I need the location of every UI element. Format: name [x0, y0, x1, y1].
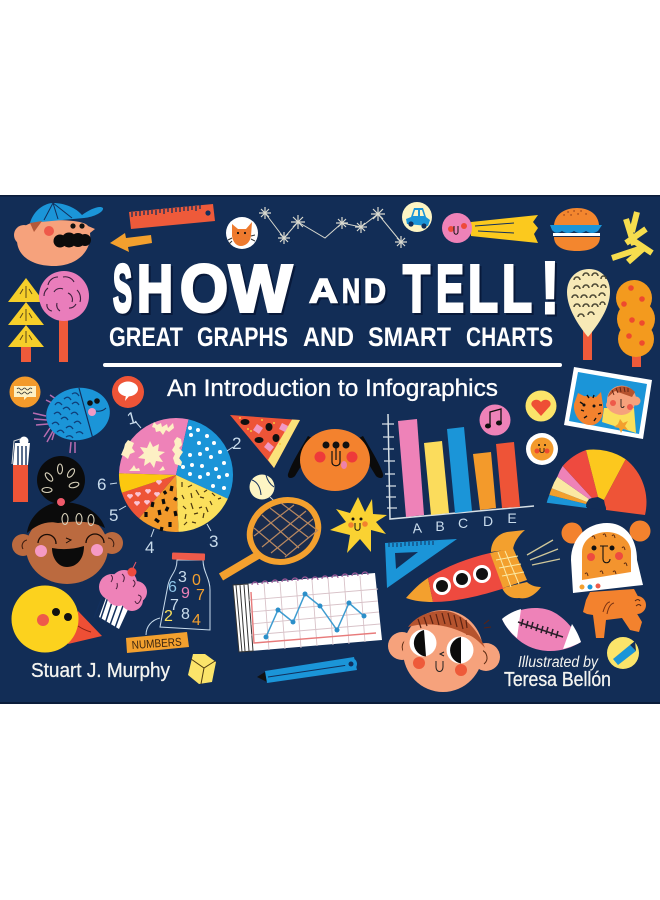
icon: heart badge	[526, 390, 556, 422]
icon: music note badge	[480, 404, 510, 436]
subtitle: Great Graphs and Smart Charts: SMART	[368, 322, 451, 352]
title: Show and Tell: S	[113, 252, 132, 326]
icon: comet	[442, 213, 538, 243]
dog body	[583, 589, 642, 638]
title: Show and Tell: D	[364, 272, 386, 310]
bar chart: E	[507, 510, 517, 526]
pie chart number labels: 2	[232, 434, 241, 453]
subtitle: Great Graphs and Smart Charts	[109, 322, 553, 352]
icon: number jar: 6	[168, 579, 177, 596]
icon: yellow star face	[330, 497, 387, 553]
icon: face badge	[526, 433, 558, 465]
icon: number jar: 3	[178, 569, 187, 586]
icon: cat badge	[226, 217, 258, 249]
notebook with line graph	[233, 572, 382, 652]
icon: number jar	[146, 552, 210, 635]
icon: number jar: 9	[181, 585, 190, 602]
illustrator credit	[504, 654, 611, 691]
bar D	[473, 452, 496, 510]
icon: cupcake	[94, 562, 147, 629]
icon: number jar: 7	[196, 587, 205, 604]
icon: yellow bird	[12, 586, 102, 652]
icon: orange bumpy tree	[616, 280, 655, 367]
icon: speech bubble badge orange	[10, 376, 40, 408]
illustrator credit: Illustrated by	[518, 654, 599, 671]
semicircle fan chart	[547, 450, 646, 515]
icon: dog face	[288, 429, 383, 491]
bar chart: B	[435, 518, 445, 534]
line series	[266, 594, 364, 637]
bar chart: C	[458, 515, 468, 531]
title: Show and Tell: L	[502, 252, 532, 326]
icon: thermometer	[12, 436, 30, 502]
pie chart number labels: 6	[97, 475, 106, 494]
title: Show and Tell: E	[436, 252, 464, 326]
pie pattern: black dashes on orange	[146, 486, 177, 531]
subtitle: Great Graphs and Smart Charts: GRAPHS	[197, 322, 288, 352]
pie chart number labels: 1	[125, 408, 139, 429]
subtitle: Great Graphs and Smart Charts: AND	[303, 322, 354, 352]
title: Show and Tell: L	[468, 252, 498, 326]
icon: girl with bun	[12, 456, 123, 584]
icon: ruler	[129, 204, 215, 229]
icon: boy with cap and mustache	[14, 203, 103, 266]
icon: pizza slice	[230, 415, 300, 468]
pie pattern: cream stars on pink	[121, 422, 183, 471]
author name: Stuart J. Murphy	[31, 660, 170, 682]
icon: set square	[385, 539, 457, 588]
bar E	[496, 442, 520, 508]
icon: pencil	[257, 657, 357, 683]
bar C	[447, 427, 472, 513]
photo of boy and tiger	[564, 367, 652, 439]
title: Show and Tell	[113, 248, 559, 329]
icon: car badge	[402, 202, 432, 232]
label: numbers tag: NUMBERS	[131, 637, 182, 652]
title: Show and Tell: !	[541, 248, 559, 329]
icon: number jar: 2	[164, 608, 173, 625]
helmet	[571, 523, 643, 593]
icon: tennis ball	[250, 474, 288, 548]
bar B	[424, 441, 449, 515]
pie pattern: dashes on yellow	[182, 482, 221, 525]
pie pattern: hearts on red	[127, 480, 162, 506]
graph grid	[249, 576, 380, 650]
bar chart: A	[412, 520, 423, 536]
tagline: An Introduction to Infographics: An Introduction to Infographics	[167, 375, 498, 402]
icon: cream tree	[567, 269, 610, 360]
icon: football	[502, 608, 581, 651]
title: Show and Tell: W	[229, 252, 293, 326]
pie chart	[119, 418, 233, 532]
pie chart number labels: 4	[145, 538, 154, 557]
icon: boy face	[388, 610, 500, 692]
icon: speech bubble badge red	[112, 376, 144, 408]
icon: arrow	[110, 233, 152, 252]
icon: pink round tree	[39, 271, 89, 362]
subtitle: Great Graphs and Smart Charts: CHARTS	[466, 322, 553, 352]
illustrator credit: Teresa Bellón	[504, 669, 611, 691]
title: Show and Tell: A	[309, 272, 338, 310]
pie pattern: white dots on blue	[181, 426, 229, 490]
icon: french fries	[612, 212, 652, 262]
bar A	[398, 419, 424, 517]
pie chart number labels: 5	[109, 506, 118, 525]
pie chart number labels: 3	[209, 532, 218, 551]
title: Show and Tell: T	[403, 252, 430, 326]
label: numbers tag	[126, 632, 189, 653]
pie chart number labels	[97, 408, 241, 557]
title: Show and Tell: O	[180, 252, 228, 326]
icon: number jar: 8	[181, 606, 190, 623]
title: Show and Tell: H	[137, 252, 173, 326]
icon: burger	[550, 208, 602, 251]
icon: tennis racket	[221, 489, 328, 577]
bar chart	[382, 414, 534, 536]
icon: star constellation	[259, 207, 407, 248]
subtitle: Great Graphs and Smart Charts: GREAT	[109, 322, 183, 352]
icon: number jar: 4	[192, 612, 201, 629]
astronaut dog	[562, 520, 650, 638]
icon: crayon badge	[607, 637, 639, 669]
icon: yellow cube	[188, 654, 216, 684]
icon: number jar: 0	[192, 572, 201, 589]
bar chart: D	[483, 513, 493, 529]
icon: blue fish creature	[33, 383, 114, 453]
title: Show and Tell: N	[342, 272, 360, 310]
icon: number jar: 7	[170, 597, 179, 614]
dog paws	[562, 522, 582, 544]
icon: yellow triangle tree	[8, 278, 44, 362]
icon: rocket	[406, 530, 560, 602]
